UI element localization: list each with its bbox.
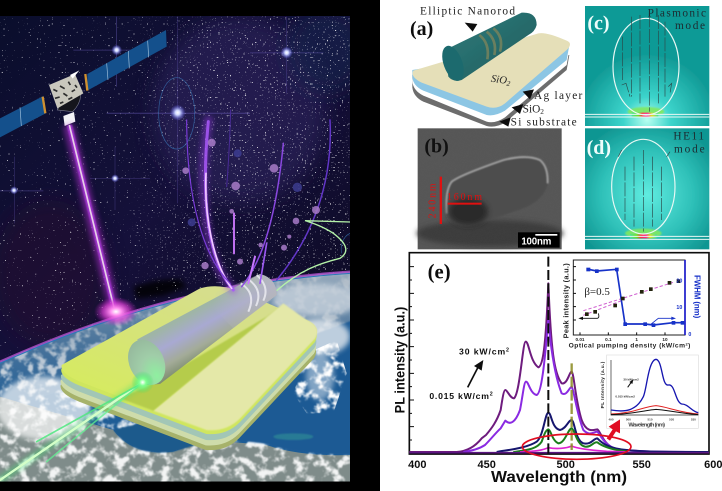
power annotations: 30 kW/cm	[459, 347, 505, 357]
satellite	[0, 30, 167, 137]
nanorod cylinder	[121, 274, 277, 391]
green thread	[277, 221, 350, 291]
field boundary	[612, 139, 675, 234]
purple emission streaks	[187, 110, 330, 290]
x axis title: Wavelength (nm)	[491, 469, 627, 486]
power annotations: 0.015 kW/cm	[429, 391, 489, 401]
inset: peak intensity and FWHM: )	[688, 343, 690, 350]
inset: peak intensity and FWHM	[561, 260, 702, 350]
inset: low-power PL spectra: 510	[648, 417, 653, 421]
purple beam from satellite to earth	[68, 125, 138, 326]
inset: peak intensity and FWHM: Optical pumping density (kW/cm	[569, 343, 685, 350]
scale bar	[518, 232, 560, 248]
dashed peak markers	[545, 257, 551, 453]
layered plate	[412, 33, 570, 127]
mode name: HE11	[673, 130, 704, 142]
layer labels with arrows: Si substrate	[511, 117, 577, 129]
earth with clouds	[0, 267, 360, 483]
layer labels with arrows: 2	[540, 107, 544, 116]
x axis numbers: 550	[633, 459, 651, 471]
field boundary	[613, 18, 679, 115]
inset: low-power PL spectra: 530	[691, 417, 696, 421]
mode name: mode	[674, 144, 705, 156]
inset: peak intensity and FWHM: 0.1	[605, 337, 612, 342]
field arrows	[618, 150, 670, 232]
red arrow to inset	[607, 419, 620, 441]
green laser output beam	[0, 371, 154, 480]
scale bar: 100nm	[521, 236, 551, 247]
panel d: HE11 mode field	[585, 128, 709, 249]
panel e: PL spectrum chart	[391, 253, 722, 486]
inset: peak intensity and FWHM: FWHM (nm)	[693, 275, 702, 319]
inset: peak intensity and FWHM: 1	[635, 337, 638, 342]
label SiO2 on top: SiO	[490, 74, 508, 87]
emission bubbles	[182, 139, 320, 269]
inset: peak intensity and FWHM: 0.01	[575, 337, 585, 342]
inset: low-power PL spectra: PL Intensity (a.u.)	[600, 361, 605, 408]
atmosphere line	[0, 272, 350, 362]
inset: peak intensity and FWHM: 10	[676, 305, 682, 311]
x axis numbers: 450	[478, 459, 496, 471]
x axis numbers: 500	[557, 459, 575, 471]
panel c: plasmonic mode field	[585, 6, 709, 126]
inset: low-power PL spectra: 520	[669, 417, 674, 421]
mode name: Plasmonic	[648, 7, 706, 19]
inset: low-power PL spectra: 500	[626, 417, 631, 421]
layer labels with arrows: SiO	[523, 103, 540, 115]
red ellipse highlight	[522, 434, 631, 459]
axis ticks	[409, 267, 414, 440]
label e: (e)	[428, 261, 451, 283]
starry space background	[0, 7, 367, 366]
inset: peak intensity and FWHM: 0	[688, 332, 691, 338]
label b: (b)	[424, 136, 449, 158]
inset: peak intensity and FWHM: β=0.5	[584, 286, 610, 298]
label a: (a)	[410, 18, 433, 40]
power annotations: 2	[490, 392, 493, 398]
panel a: device schematic	[410, 5, 583, 129]
label: elliptic nanorod with arrow: Elliptic Nanorod	[420, 5, 515, 17]
inset: peak intensity and FWHM: 10	[662, 337, 668, 342]
red dimension marks: 240nm	[427, 183, 438, 218]
power annotations: 2	[506, 347, 509, 353]
red dimension marks: 160nm	[447, 192, 482, 203]
nanorod substrate plate	[61, 286, 317, 450]
inset: low-power PL spectra: Wavelength (nm)	[628, 423, 665, 429]
x axis numbers: 400	[408, 459, 426, 471]
label: elliptic nanorod with arrow	[420, 5, 515, 32]
power annotations	[429, 347, 509, 401]
inset: low-power PL spectra: 30 kW/cm2	[623, 378, 639, 382]
inset: low-power PL spectra	[600, 355, 698, 429]
label c: (c)	[587, 12, 610, 34]
label SiO2 on top: 2	[506, 79, 511, 88]
nanorod micrograph	[446, 157, 548, 226]
inset: peak intensity and FWHM: 2	[685, 341, 688, 346]
inset: peak intensity and FWHM: 20	[676, 278, 682, 284]
satellite solar panels	[0, 30, 167, 137]
label d: (d)	[587, 137, 611, 159]
mode name: mode	[675, 20, 705, 32]
panel: artistic illustration of nanorod laser in space	[0, 7, 367, 483]
y axis title: PL intensity (a.u.)	[391, 307, 407, 413]
inset: peak intensity and FWHM: Peak intensity (a.u.)	[561, 263, 570, 338]
panel b: SEM image	[417, 128, 563, 249]
inset: low-power PL spectra: 490	[609, 417, 614, 421]
inset: low-power PL spectra: 0.015 kW/cm2	[615, 394, 635, 398]
nanorod	[438, 13, 537, 84]
x axis numbers	[408, 459, 722, 471]
x axis numbers: 600	[704, 459, 722, 471]
bright star flares	[0, 17, 323, 223]
mode name	[673, 130, 705, 156]
layer labels with arrows: Ag layer	[534, 90, 583, 102]
layer labels with arrows	[499, 89, 583, 129]
field arrows	[622, 13, 672, 112]
mode name	[648, 7, 706, 32]
red dimension marks	[427, 177, 482, 224]
spectra curves	[409, 283, 709, 453]
axes frame	[409, 253, 709, 454]
